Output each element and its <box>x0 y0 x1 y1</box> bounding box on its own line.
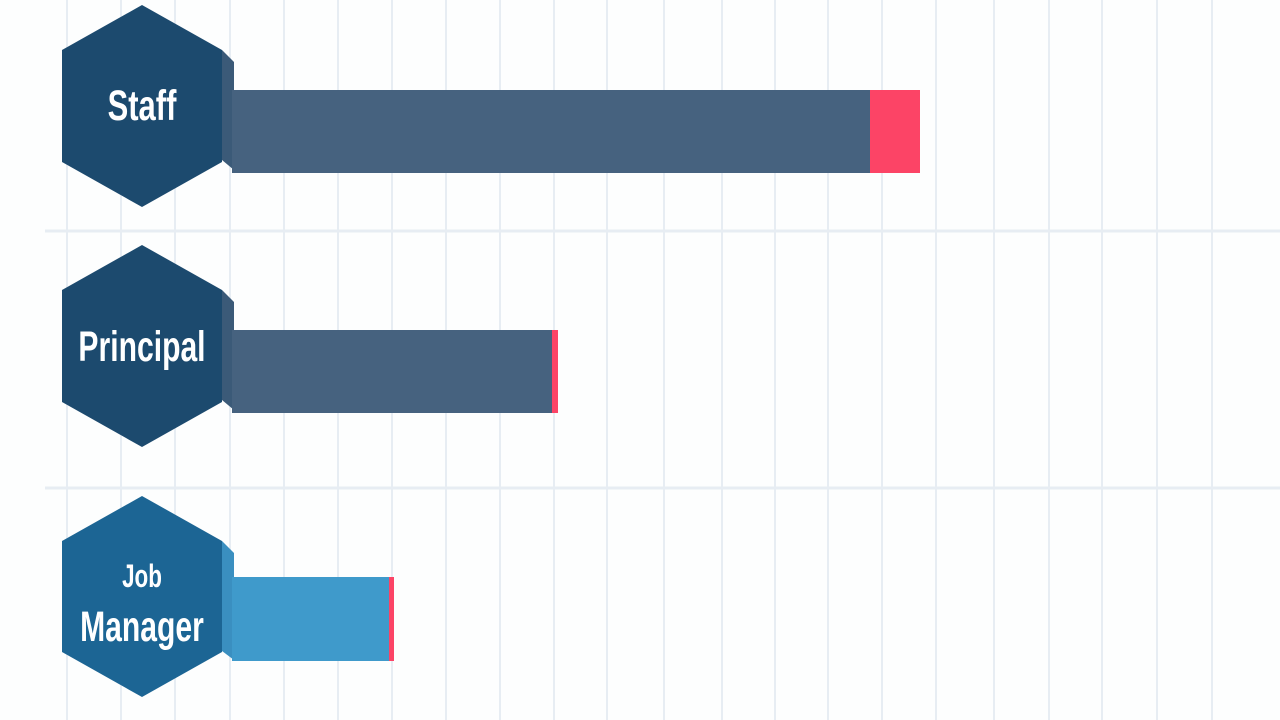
bar: Staff <box>222 50 920 173</box>
hexagon: Principal <box>62 245 222 447</box>
hexagon: Staff <box>62 5 222 207</box>
row: Principal <box>62 245 558 447</box>
hexagon: Manager <box>62 496 222 697</box>
hexagon: Manager: Job <box>122 558 162 594</box>
hexagon: Manager: Manager <box>80 602 204 650</box>
hexagon: Principal: Principal <box>78 322 206 370</box>
row: Staff <box>62 5 920 207</box>
row: Manager <box>62 496 394 697</box>
bar: Principal <box>222 290 558 413</box>
hexagon: Staff: Staff <box>108 81 177 129</box>
bar: Manager <box>222 541 394 661</box>
